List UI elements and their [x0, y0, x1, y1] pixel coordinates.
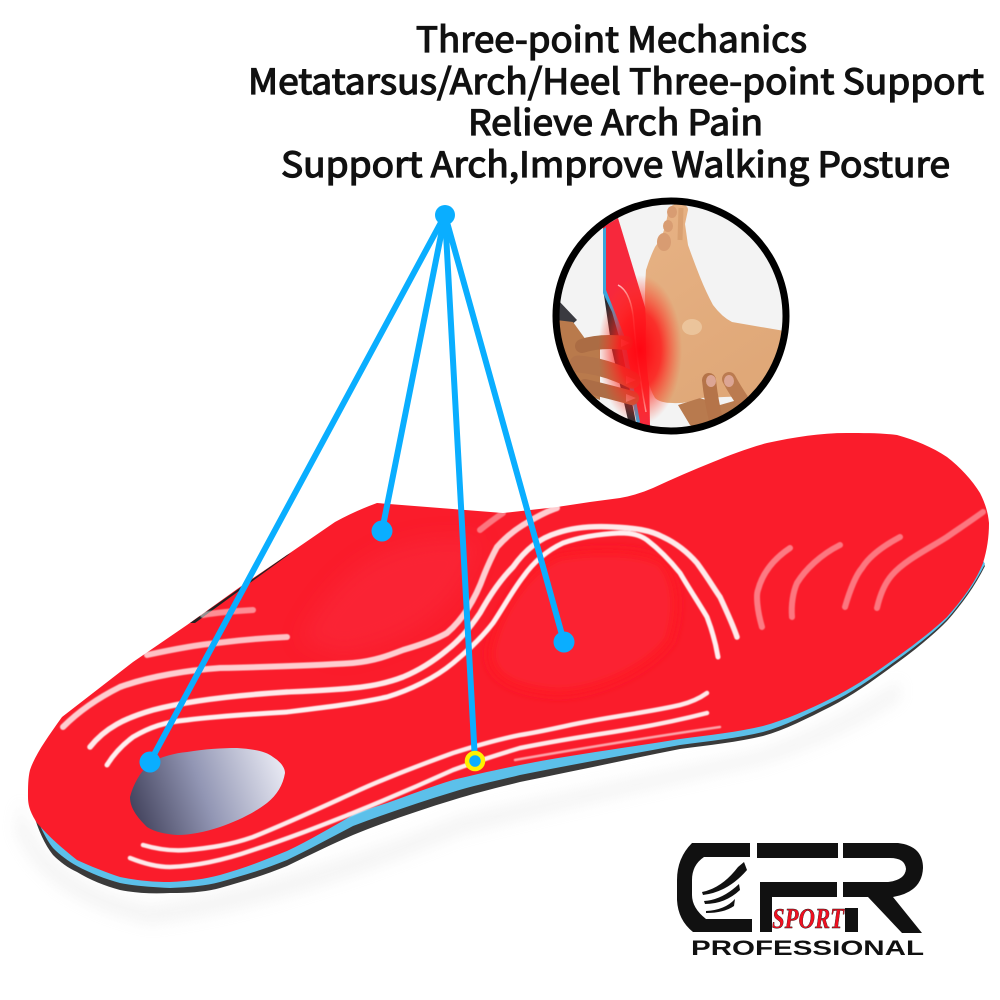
soft shadow under insole [15, 680, 900, 925]
brand logo: CFR Sport Professional [677, 843, 924, 960]
edge point dot with yellow ring [467, 753, 483, 769]
blue foam layer [30, 520, 985, 888]
heel gel pad [130, 748, 285, 835]
logo wing strokes [702, 862, 747, 913]
callout: blue pointer lines to support points [140, 205, 574, 772]
logo letter C [677, 843, 752, 932]
insole [15, 433, 989, 925]
photo inset: foot pressed against insole [550, 195, 795, 440]
metatarsus point dot [372, 520, 392, 542]
heel point dot [140, 752, 160, 772]
red top surface [28, 433, 989, 882]
white stripes [63, 508, 983, 867]
logo word SPORT: SPORT [772, 904, 846, 935]
dark arch edge [190, 553, 291, 623]
title: three-point mechanics text block: Relieve Arch Pain [468, 95, 763, 146]
title: three-point mechanics text block: Support Arch,Improve Walking Posture [281, 137, 950, 188]
logo letter F [757, 843, 838, 932]
callout origin dot [435, 205, 455, 225]
logo word PROFESSIONAL: PROFESSIONAL [691, 937, 924, 960]
arch point dot [554, 632, 574, 652]
raised arch highlight [300, 538, 480, 655]
arch pad shading [490, 551, 676, 693]
title: three-point mechanics text block [248, 12, 984, 188]
foam base layer [30, 520, 985, 893]
logo letter R [843, 843, 923, 933]
title: three-point mechanics text block: Three-point Mechanics [416, 12, 807, 63]
title: three-point mechanics text block: Metatarsus/Arch/Heel Three-point Support [248, 54, 984, 105]
